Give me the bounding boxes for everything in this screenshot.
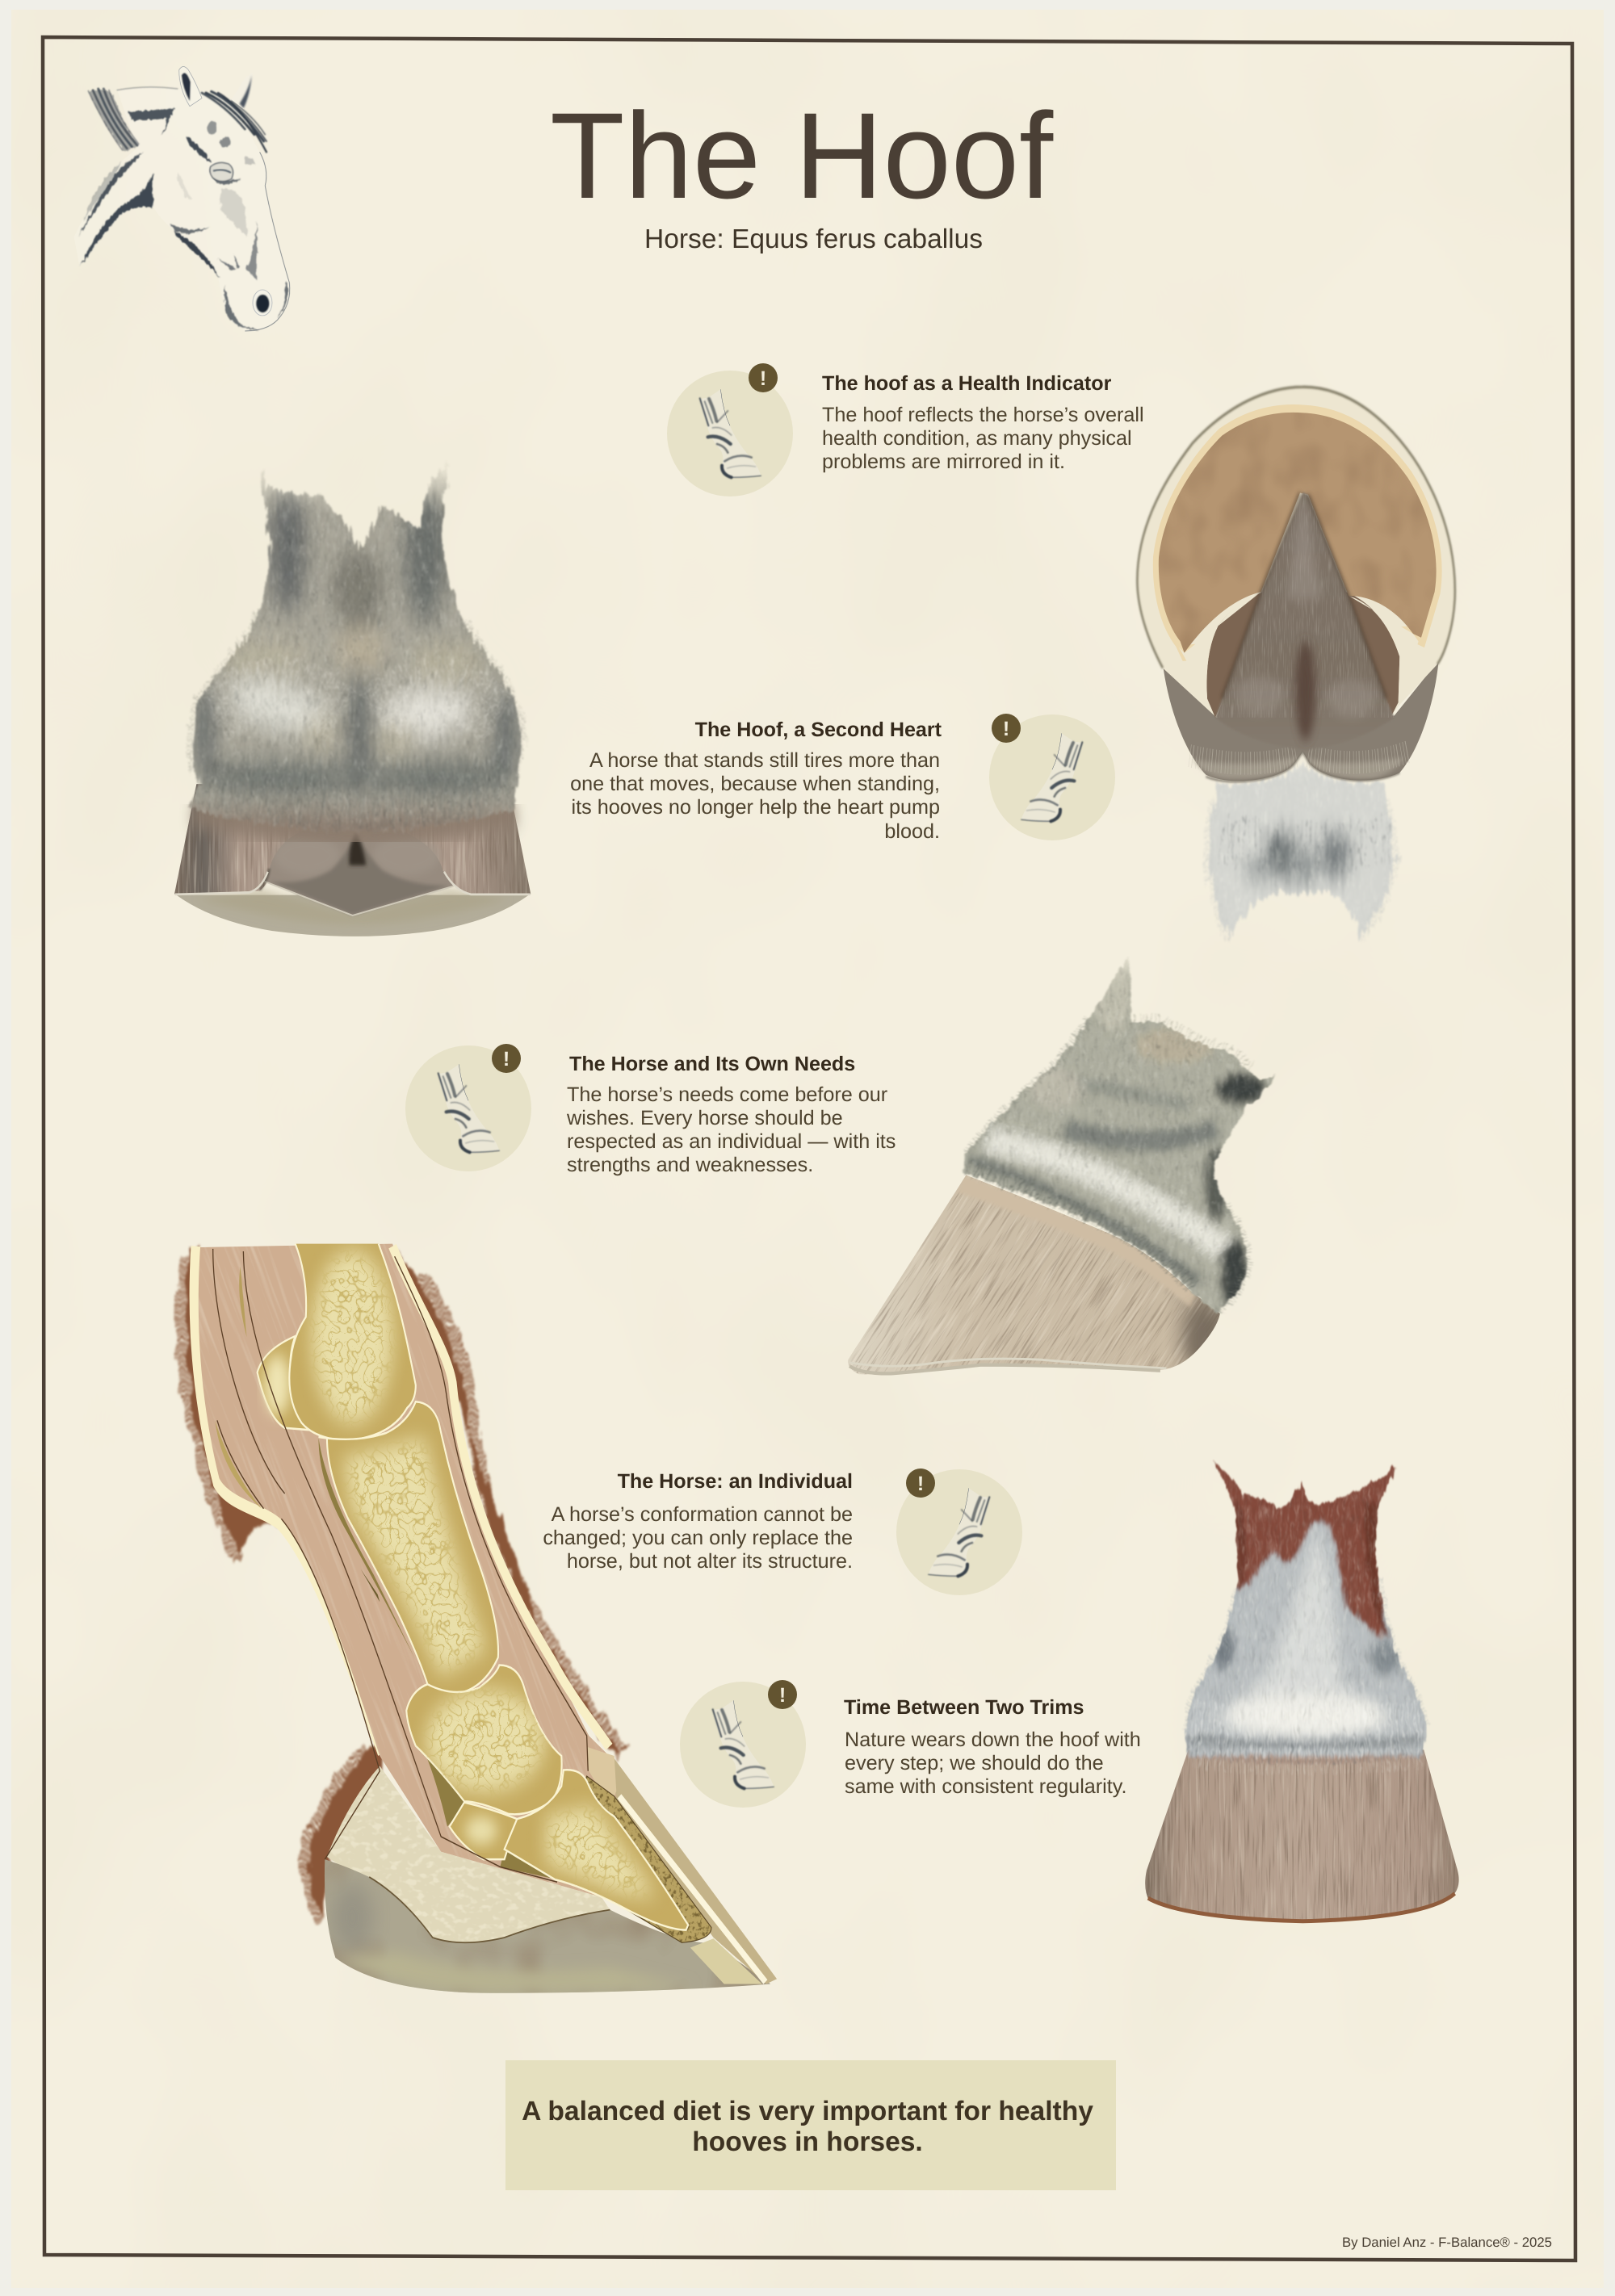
red-brown coat — [184, 1247, 623, 1922]
heading: The Horse and Its Own Needs — [569, 1053, 855, 1075]
coffin bone — [505, 1770, 688, 1930]
body text: health condition, as many physical — [822, 427, 1132, 450]
wall rim — [175, 872, 531, 895]
body text: wishes. Every horse should be — [566, 1107, 843, 1129]
info block: the hoof, a second heart — [570, 714, 1115, 843]
icon: hoof in circle: ! — [1003, 718, 1009, 740]
icon: hoof in circle: ! — [503, 1048, 510, 1070]
heading: The hoof as a Health Indicator — [822, 372, 1112, 395]
hair tuft — [1203, 762, 1402, 941]
laminar layer — [551, 1771, 715, 1947]
illustration: hoof, sole view — [1137, 387, 1455, 953]
hoof wall — [848, 1175, 1220, 1376]
info block: the horse, an individual — [543, 1469, 1022, 1595]
tendon and soft tissue — [199, 1243, 616, 1896]
callout: balanced diet: A balanced diet is very important for healthy — [522, 2097, 1093, 2126]
sole — [1152, 405, 1443, 660]
body text: every step; we should do the — [845, 1752, 1104, 1774]
icon: ears — [179, 66, 253, 109]
body text: respected as an individual — with its — [567, 1130, 896, 1153]
short pastern bone — [406, 1665, 562, 1814]
body text: The hoof reflects the horse’s overall — [822, 404, 1144, 426]
illustration: hoof, side view — [848, 958, 1276, 1376]
icon: hoof in circle: ! — [917, 1473, 924, 1495]
frog and heel bulbs — [260, 819, 454, 915]
tendon outlines — [213, 1249, 588, 1882]
body text: strengths and weaknesses. — [567, 1154, 813, 1176]
bars — [1179, 592, 1419, 718]
skin band dorsal — [392, 1246, 609, 1747]
body text: Nature wears down the hoof with — [845, 1728, 1141, 1751]
body text: blood. — [884, 820, 940, 843]
icon: hoof in circle: ! — [760, 367, 766, 390]
cannon bone — [289, 1244, 416, 1440]
callout: balanced diet — [505, 2060, 1116, 2190]
digital cushion — [323, 1761, 619, 1953]
icon: hoof in circle — [989, 714, 1115, 840]
info block: time between two trims — [680, 1680, 1141, 1808]
illustration: hoof, rear view — [170, 452, 535, 936]
fur — [962, 958, 1276, 1314]
body text: horse, but not alter its structure. — [567, 1550, 853, 1573]
icon: hoof in circle — [896, 1469, 1022, 1595]
icon: nostril — [253, 290, 272, 316]
frog — [1214, 489, 1397, 750]
body text: one that moves, because when standing, — [570, 773, 940, 795]
heading: Time Between Two Trims — [844, 1696, 1084, 1719]
icon: hoof in circle: ! — [779, 1684, 786, 1707]
heading: The Hoof, a Second Heart — [695, 719, 942, 741]
illustration: anatomical cross-section — [173, 1045, 925, 1993]
icon: hoof in circle — [680, 1680, 806, 1808]
body text — [570, 749, 940, 843]
fur — [1179, 1453, 1437, 1774]
body text: its hooves no longer help the heart pump — [572, 796, 940, 819]
coronary band — [194, 813, 514, 833]
info block: the hoof as a health indicator — [667, 363, 1144, 496]
body text — [822, 404, 1144, 473]
frog — [318, 1852, 774, 1998]
icon: hoof in circle — [667, 363, 793, 496]
hoof wall — [587, 1747, 777, 1984]
body text: A horse that stands still tires more than — [589, 749, 940, 772]
sesamoid bone — [258, 1336, 315, 1431]
navicular bone — [450, 1802, 517, 1859]
illustration: horse head sketch — [74, 66, 290, 331]
sole crescent — [176, 895, 529, 936]
body text — [845, 1728, 1141, 1798]
long pastern bone — [318, 1401, 498, 1695]
body text — [566, 1083, 896, 1176]
body text: The horse’s needs come before our — [567, 1083, 887, 1106]
hoof wall — [170, 781, 535, 899]
heading: The Horse: an Individual — [618, 1470, 853, 1493]
icon: eye — [210, 162, 233, 182]
body text: A horse’s conformation cannot be — [552, 1503, 853, 1526]
info block: the horse and its own needs — [405, 1044, 896, 1176]
body text: same with consistent regularity. — [845, 1775, 1127, 1798]
mane strands — [88, 87, 266, 152]
body text: problems are mirrored in it. — [822, 450, 1065, 473]
body text: changed; you can only replace the — [543, 1527, 853, 1549]
wall ring — [1137, 387, 1455, 718]
skin band palmar — [195, 1246, 383, 1753]
illustration: hoof, front view — [1141, 1453, 1464, 1926]
dark speckled fat pads — [215, 1267, 557, 1879]
icon: hoof in circle — [405, 1044, 531, 1171]
heel skin — [1163, 660, 1439, 781]
body text — [543, 1503, 853, 1573]
subtitle: Horse: Equus ferus caballus — [644, 224, 983, 254]
hoof wall — [1141, 1747, 1464, 1926]
title: The Hoof — [550, 88, 1054, 224]
callout: balanced diet: hooves in horses. — [692, 2127, 923, 2157]
credit: By Daniel Anz - F-Balance® - 2025 — [1342, 2235, 1552, 2250]
fur — [180, 452, 535, 840]
